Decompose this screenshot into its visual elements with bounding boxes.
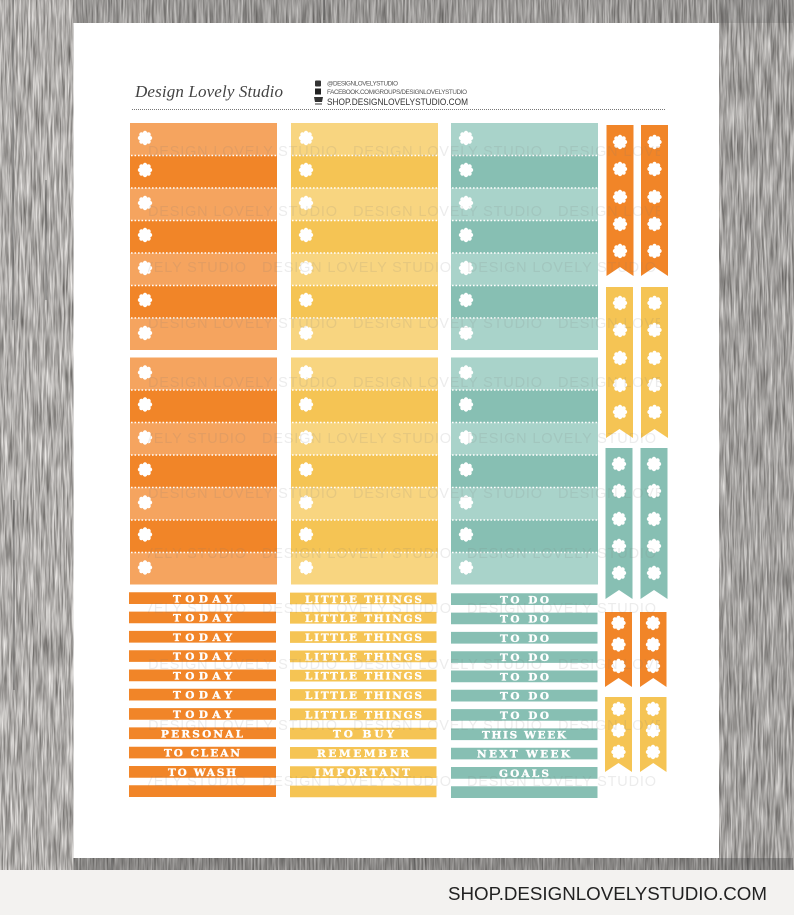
panel: orange header labels: TODAY — [173, 670, 232, 682]
watermark text rows: DESIGN LOVELY STUDIO — [353, 316, 542, 332]
watermark text rows: DESIGN LOVELY STUDIO — [558, 375, 747, 391]
watermark text rows: DESIGN LOVELY STUDIO — [148, 204, 337, 220]
panel: yellow header labels — [290, 593, 436, 797]
watermark text rows: DESIGN LOVELY STUDIO — [558, 204, 747, 220]
panel: yellow header labels: REMEMBER — [317, 748, 409, 760]
panel: yellow header labels: LITTLE THINGS — [305, 594, 422, 606]
header logo script: Design Lovely Studio — [134, 82, 283, 101]
ribbons: orange short — [605, 612, 666, 687]
watermark text rows: DESIGN LOVELY STUDIO — [148, 718, 337, 734]
watermark text rows: DESIGN LOVELY STUDIO — [353, 718, 542, 734]
footer band — [0, 870, 794, 915]
panel: yellow header labels: IMPORTANT — [315, 767, 410, 779]
watermark text rows: DESIGN LOVELY STUDIO — [148, 144, 337, 160]
panel: teal header labels — [451, 593, 598, 798]
icon: facebook — [315, 88, 321, 94]
panel: yellow header labels: LITTLE THINGS — [305, 613, 422, 625]
watermark text rows: DESIGN LOVELY STUDIO — [558, 486, 747, 502]
panel: teal header labels: TO DO — [500, 710, 549, 722]
watermark text rows: DESIGN LOVELY STUDIO — [353, 657, 542, 673]
panel: orange checklist bottom — [130, 358, 277, 584]
panel: yellow checklist bottom — [291, 358, 438, 584]
instagram handle: @DESIGNLOVELYSTUDIO — [327, 80, 398, 88]
watermark text rows: DESIGN LOVELY STUDIO — [467, 601, 656, 617]
ribbons: yellow tall — [606, 287, 668, 438]
watermark text rows: DESIGN LOVELY STUDIO — [467, 546, 656, 562]
header contact block — [314, 80, 468, 107]
paper sheet — [74, 23, 719, 858]
panel: orange header labels: TODAY — [173, 612, 232, 624]
panel: teal header labels: TO DO — [500, 652, 549, 664]
panel: yellow header labels: TO BUY — [333, 729, 394, 741]
watermark text rows: DESIGN LOVELY STUDIO — [262, 546, 451, 562]
icon: shopping cart — [314, 97, 323, 104]
watermark text rows: DESIGN LOVELY STUDIO — [57, 431, 246, 447]
panel: orange checklist top — [130, 123, 277, 350]
ribbons: orange tall — [606, 125, 668, 276]
panel: orange header labels: PERSONAL — [161, 728, 244, 740]
panel: teal header labels: TO DO — [500, 633, 549, 645]
panel: yellow header labels: LITTLE THINGS — [305, 632, 422, 644]
watermark text rows: DESIGN LOVELY STUDIO — [558, 718, 747, 734]
panel: teal header labels: NEXT WEEK — [477, 749, 571, 761]
watermark text rows: DESIGN LOVELY STUDIO — [262, 431, 451, 447]
watermark text rows: DESIGN LOVELY STUDIO — [57, 546, 246, 562]
panel: orange header labels: TODAY — [173, 709, 232, 721]
watermark text rows: DESIGN LOVELY STUDIO — [467, 431, 656, 447]
watermark text rows: DESIGN LOVELY STUDIO — [262, 260, 451, 276]
panel: orange header labels: TO WASH — [168, 767, 236, 779]
watermark text rows: DESIGN LOVELY STUDIO — [57, 774, 246, 790]
watermark text rows: DESIGN LOVELY STUDIO — [148, 316, 337, 332]
panel: yellow checklist top — [291, 123, 438, 350]
panel: orange header labels: TODAY — [173, 651, 232, 663]
panel: teal header labels: TO DO — [500, 671, 549, 683]
watermark text rows — [148, 146, 660, 786]
watermark text rows: DESIGN LOVELY STUDIO — [558, 144, 747, 160]
panel: teal header labels: GOALS — [499, 768, 549, 780]
panel: teal header labels: TO DO — [500, 594, 549, 606]
watermark text rows: DESIGN LOVELY STUDIO — [353, 486, 542, 502]
icon: instagram — [315, 80, 321, 86]
panel: orange header labels: TO CLEAN — [164, 748, 240, 760]
footer url: SHOP.DESIGNLOVELYSTUDIO.COM — [448, 884, 767, 904]
watermark text rows: DESIGN LOVELY STUDIO — [558, 657, 747, 673]
watermark text rows: DESIGN LOVELY STUDIO — [262, 601, 451, 617]
watermark text rows: DESIGN LOVELY STUDIO — [353, 204, 542, 220]
panel: teal header labels: TO DO — [500, 614, 549, 626]
watermark text rows: DESIGN LOVELY STUDIO — [148, 486, 337, 502]
watermark text rows: DESIGN LOVELY STUDIO — [353, 375, 542, 391]
watermark text rows: DESIGN LOVELY STUDIO — [558, 316, 747, 332]
watermark text rows: DESIGN LOVELY STUDIO — [57, 601, 246, 617]
shop url: SHOP.DESIGNLOVELYSTUDIO.COM — [327, 97, 468, 107]
header dotted divider — [132, 108, 665, 110]
facebook url: FACEBOOK.COM/GROUPS/DESIGNLOVELYSTUDIO — [327, 89, 467, 96]
ribbons: yellow short — [605, 697, 666, 772]
watermark text rows: DESIGN LOVELY STUDIO — [262, 774, 451, 790]
watermark text rows: DESIGN LOVELY STUDIO — [148, 657, 337, 673]
panel: teal header labels: THIS WEEK — [482, 729, 567, 741]
watermark text rows: DESIGN LOVELY STUDIO — [148, 375, 337, 391]
panel: orange header labels: TODAY — [173, 632, 232, 644]
panel: yellow header labels: LITTLE THINGS — [305, 690, 422, 702]
panel: teal header labels: TO DO — [500, 691, 549, 703]
panel: orange header labels: TODAY — [173, 594, 232, 606]
watermark text rows: DESIGN LOVELY STUDIO — [353, 144, 542, 160]
panel: yellow header labels: LITTLE THINGS — [305, 651, 422, 663]
panel: teal checklist bottom — [451, 358, 598, 584]
panel: orange header labels — [129, 592, 276, 797]
panel: teal checklist top — [451, 123, 598, 350]
panel: orange header labels: TODAY — [173, 690, 232, 702]
ribbons: teal tall — [606, 448, 668, 599]
watermark text rows: DESIGN LOVELY STUDIO — [467, 774, 656, 790]
panel: yellow header labels: LITTLE THINGS — [305, 709, 422, 721]
watermark text rows: DESIGN LOVELY STUDIO — [57, 260, 246, 276]
panel: yellow header labels: LITTLE THINGS — [305, 671, 422, 683]
watermark text rows: DESIGN LOVELY STUDIO — [467, 260, 656, 276]
